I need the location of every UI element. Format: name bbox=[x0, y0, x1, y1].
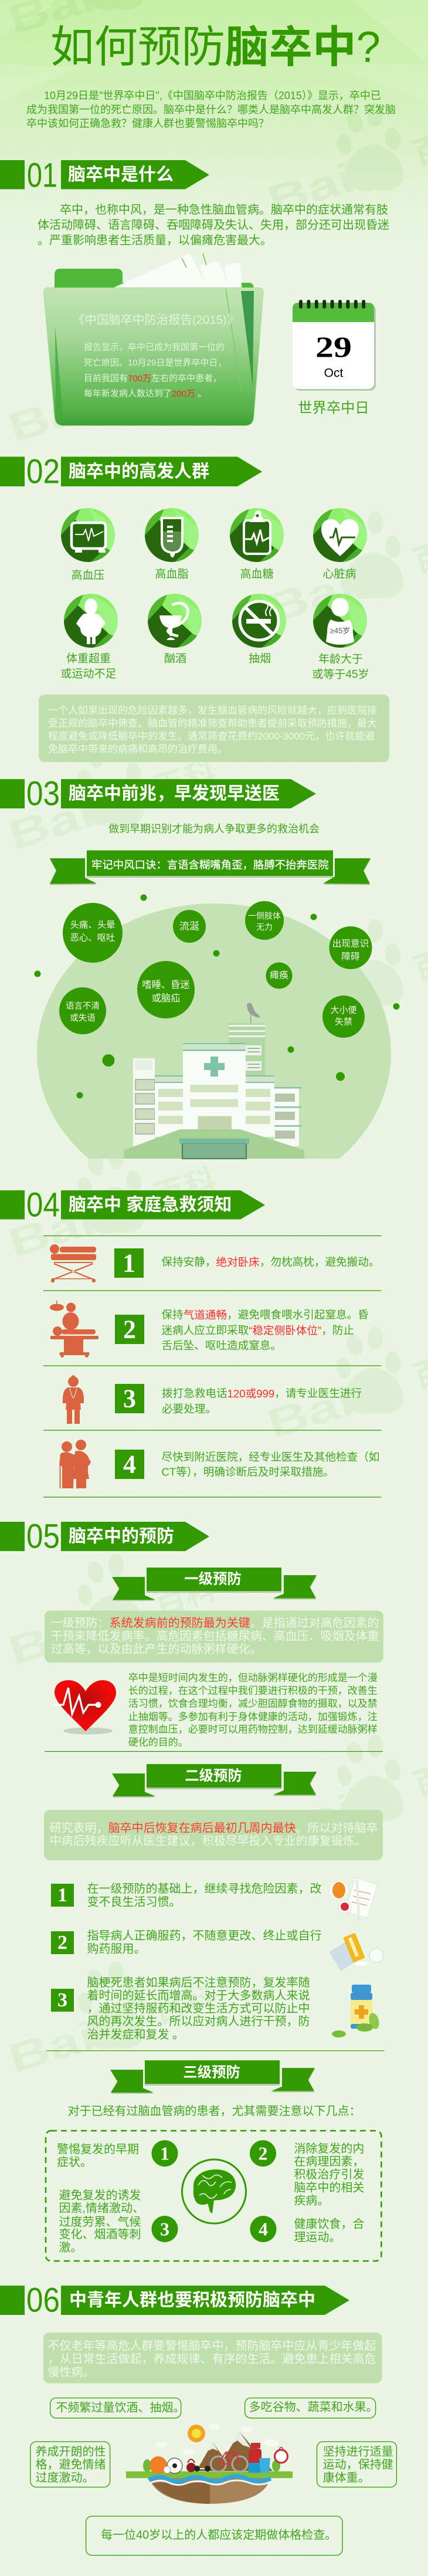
young adults panel: 慢性病。 bbox=[48, 2365, 95, 2379]
basketball bbox=[150, 2456, 167, 2474]
icon: elderly couple bbox=[59, 1440, 91, 1488]
secondary item 1 text: 变不良生活习惯。 bbox=[87, 1895, 181, 1908]
young adults panel bbox=[43, 2333, 382, 2383]
section header 02: 02 bbox=[26, 453, 60, 490]
section header 04: 04 bbox=[26, 1186, 60, 1224]
primary prevention text: 活习惯，饮食合理均衡，减少胆固醇食物的摄取，以及禁 bbox=[128, 1698, 378, 1710]
symptom bubble: speech: 或失语 bbox=[70, 1013, 96, 1023]
step 3 text: 拨打急救电话120或999，请专业医生进行 bbox=[162, 1387, 362, 1400]
secondary item 2 text bbox=[87, 1929, 321, 1955]
section 1 text bbox=[38, 203, 389, 247]
back tower bbox=[229, 1023, 265, 1076]
section header 01: 脑卒中是什么 bbox=[68, 165, 174, 184]
tip: annual checkup bbox=[86, 2516, 342, 2555]
icon: operating table bbox=[50, 1301, 98, 1358]
tip: exercise bbox=[317, 2442, 396, 2487]
screening note panel: 受正规的脑卒中筛查。脑血管的精准筛查帮助患者提前采取预防措施，最大 bbox=[48, 718, 377, 729]
symptom bubble: drowsiness: 嗜睡、昏迷 bbox=[142, 980, 190, 990]
icon: bowl, alcohol bbox=[148, 594, 202, 648]
title: 如何预防脑卒中? bbox=[50, 22, 381, 72]
tertiary point 2 text: 消除复发的内 bbox=[294, 2142, 364, 2155]
tip: alcohol and smoking bbox=[50, 2398, 185, 2418]
clouds bbox=[155, 2424, 278, 2455]
number 1 bbox=[114, 1248, 144, 1278]
step 1 text: 保持安静，绝对卧床，勿枕高枕，避免搬动。 bbox=[162, 1255, 379, 1268]
section header 01 bbox=[0, 156, 209, 195]
bicycle bbox=[211, 2452, 247, 2472]
secondary item 3 text: 脑梗死患者如果病后不注意预防，复发率随 bbox=[87, 1976, 310, 1989]
section header 04 bbox=[0, 1186, 265, 1224]
risk factor labels: 心脏病 bbox=[322, 568, 356, 581]
risk factor labels bbox=[60, 568, 369, 681]
tertiary point 2 text: 疾病。 bbox=[294, 2194, 329, 2208]
symptom bubble: incontinence: 失禁 bbox=[335, 1017, 352, 1027]
hospital backdrop circle bbox=[37, 903, 391, 1159]
young adults panel: 不仅老年等高危人群要警惕脑卒中，预防脑卒中应从青少年做起 bbox=[48, 2339, 376, 2352]
secondary item 2 bbox=[51, 1929, 383, 1971]
symptom bubble: speech: 语言不清 bbox=[66, 1001, 100, 1011]
section header 04: 脑卒中 家庭急救须知 bbox=[69, 1196, 232, 1214]
step 4 text: CT等），明确诊断后及时采取措施。 bbox=[162, 1465, 334, 1478]
tip: personality bbox=[30, 2442, 110, 2487]
icon: pill bottle and blister pack bbox=[329, 1933, 383, 1971]
subtitle: 做到早期识别才能为病人争取更多的救治机会 bbox=[108, 823, 320, 835]
ribbon: tertiary prevention bbox=[110, 2060, 315, 2094]
symptom bubble: incontinence bbox=[322, 996, 365, 1038]
tip: exercise: 坚持进行适量 bbox=[323, 2445, 393, 2458]
secondary item 3 text: 治并发症和复发 。 bbox=[87, 2028, 184, 2042]
divider bbox=[46, 2050, 385, 2052]
symptom bubble: drooling: 流涎 bbox=[179, 921, 199, 932]
number 3: 3 bbox=[123, 1385, 136, 1413]
step 2 text: 舌后坠、呕吐造成窒息。 bbox=[162, 1339, 281, 1352]
step 2 text: 迷病人应立即采取“稳定侧卧体位”，防止 bbox=[162, 1324, 354, 1336]
secondary item 2 text: 指导病人正确服药，不随意更改、终止或自行 bbox=[87, 1929, 321, 1942]
tertiary prevention dashed panel bbox=[46, 2131, 381, 2261]
folder body text: 目前我国有700万左右的卒中患者， bbox=[84, 373, 222, 384]
tertiary point 3 text bbox=[59, 2189, 144, 2254]
secondary prevention panel bbox=[44, 1810, 383, 1860]
tertiary point 2 text bbox=[294, 2142, 364, 2208]
divider bbox=[45, 1751, 383, 1752]
icon: monitor, high blood pressure bbox=[61, 508, 115, 562]
intro text bbox=[26, 90, 396, 129]
step 3 text bbox=[162, 1387, 362, 1415]
tertiary point 4 text bbox=[294, 2218, 364, 2244]
primary prevention panel: 一级预防：系统发病前的预防最为关键。是指通过对高危因素的 bbox=[51, 1616, 379, 1630]
side wings bbox=[155, 1075, 301, 1146]
intro text: 10月29日是"世界卒中日",《中国脑卒中防治报告（2015）》显示，卒中已 bbox=[44, 90, 381, 101]
step 4: hospital check bbox=[59, 1440, 379, 1488]
number 1 bbox=[51, 1884, 74, 1907]
risk factor labels: 或等于45岁 bbox=[312, 668, 369, 681]
ribbon: primary prevention: 一级预防 bbox=[184, 1571, 242, 1587]
section header 02 bbox=[0, 453, 262, 490]
primary prevention text: 卒中是短时间内发生的，但动脉粥样硬化的形成是一个漫 bbox=[128, 1672, 378, 1684]
centre tower bbox=[183, 1043, 246, 1136]
number 3 bbox=[115, 1384, 144, 1413]
symptom bubble: incontinence: 大小便 bbox=[330, 1006, 357, 1015]
secondary item 3 text bbox=[87, 1976, 310, 2042]
ground bbox=[126, 2472, 293, 2478]
mountains bbox=[196, 2432, 273, 2471]
tertiary point 2 text: 积极治疗引发 bbox=[294, 2168, 364, 2181]
primary prevention text: 长的过程，在这个过程中我们要进行积极的干预，改善生 bbox=[128, 1685, 378, 1697]
icon: overweight figure bbox=[64, 594, 118, 648]
water bottle and glass bbox=[249, 2443, 270, 2473]
step 1: lying on a gurney bbox=[50, 1244, 379, 1282]
section header 06: 06 bbox=[26, 2281, 60, 2320]
risk factor labels: 年龄大于 bbox=[318, 652, 363, 665]
step 4 text bbox=[162, 1451, 379, 1478]
young adults panel: ，从日常生活做起，养成规律、有序的生活。避免患上相关高危 bbox=[48, 2352, 376, 2366]
icon: no smoking bbox=[232, 594, 286, 648]
symptom bubble: drowsiness bbox=[137, 961, 195, 1018]
section header 03: 脑卒中前兆，早发现早送医 bbox=[69, 784, 280, 804]
screening note panel bbox=[39, 695, 389, 762]
number 1: 1 bbox=[57, 1884, 67, 1906]
section 1 text: 卒中，也称中风，是一种急性脑血管病。脑卒中的症状通常有肢 bbox=[60, 203, 388, 216]
healthy lifestyle island illustration bbox=[126, 2424, 293, 2504]
section header 06 bbox=[0, 2281, 349, 2320]
icon: gurney bbox=[50, 1244, 96, 1282]
intro text: 卒中该如何正确急救？健康人群也要警惕脑卒中吗？ bbox=[26, 117, 269, 129]
symptom bubble: paralysis: 瘫痪 bbox=[270, 970, 288, 981]
tertiary point 2 text: 脑卒中的相关 bbox=[294, 2181, 364, 2194]
tip: personality: 过度激动。 bbox=[35, 2471, 94, 2484]
icon: person aged 45+ bbox=[313, 594, 367, 648]
folder body text: 每年新发病人数达到了200万 。 bbox=[84, 388, 206, 399]
secondary item 3 text: ，通过坚持服药和改变生活方式可以防止中 bbox=[87, 2002, 310, 2015]
icon: medicine bottle with green pills bbox=[332, 1985, 381, 2037]
symptom bubble: headache bbox=[63, 903, 123, 963]
screening note panel: 程度避免或降低脑卒中的发生。通常筛查花费约2000-3000元，也许就能避 bbox=[48, 731, 375, 742]
tertiary point 3 text: 激。 bbox=[59, 2241, 82, 2254]
hospital illustration bbox=[124, 1003, 304, 1159]
number 2: 2 bbox=[123, 1315, 136, 1343]
dividers bbox=[43, 1235, 381, 1497]
number 3 bbox=[51, 1989, 74, 2012]
primary prevention text bbox=[128, 1672, 378, 1748]
secondary item 3 text: 着时间的延长而增高。对于大多数病人来说 bbox=[87, 1989, 310, 2002]
risk factor labels: 高血脂 bbox=[155, 568, 189, 581]
risk factor labels: 酗酒 bbox=[164, 652, 186, 665]
section header 01: 01 bbox=[27, 156, 57, 195]
primary prevention text: 意控制血压，必要时可以用药物控制，达到延缓动脉粥样 bbox=[128, 1724, 378, 1735]
section 1 text: 体活动障碍、语言障碍、吞咽障碍及失认、失用，部分还可出现昏迷 bbox=[38, 218, 389, 232]
step 2 text: 保持气道通畅，避免喂食喂水引起窒息。昏 bbox=[162, 1308, 369, 1321]
number circles: 2 bbox=[258, 2143, 267, 2164]
left stair block bbox=[133, 1058, 155, 1146]
tertiary intro text: 对于已经有过脑血管病的患者，尤其需要注意以下几点： bbox=[68, 2104, 361, 2118]
intro text: 成为我国第一位的死亡原因。脑卒中是什么？哪类人是脑卒中高发人群？突发脑 bbox=[26, 104, 396, 116]
tip: personality: 养成开朗的性 bbox=[35, 2445, 106, 2458]
symptom bubble: paralysis bbox=[266, 962, 292, 989]
risk factor labels: 体重超重 bbox=[66, 652, 111, 665]
kettlebell and dumbbell bbox=[186, 2459, 210, 2472]
symptom bubble: drooling bbox=[173, 910, 206, 943]
number 2 bbox=[115, 1315, 144, 1344]
number 2 bbox=[51, 1931, 74, 1954]
secondary prevention panel: 研究表明，脑卒中后恢复在病后最初几周内最快。所以对待脑卒 bbox=[50, 1822, 378, 1835]
section header 02: 脑卒中的高发人群 bbox=[69, 462, 209, 481]
river bbox=[149, 2476, 271, 2482]
ribbon: tertiary prevention: 三级预防 bbox=[183, 2065, 240, 2080]
folder illustration bbox=[43, 253, 263, 426]
soil bbox=[149, 2478, 270, 2504]
tip: personality: 格，避免情绪 bbox=[35, 2458, 106, 2472]
symptom bubble: limb weakness bbox=[245, 901, 284, 940]
risk factor labels: 抽烟 bbox=[249, 652, 271, 665]
ribbon: secondary prevention bbox=[112, 1764, 317, 1798]
ribbon: secondary prevention: 二级预防 bbox=[185, 1768, 242, 1784]
icon: person aged 45+: ≥45岁 bbox=[330, 627, 350, 635]
ribbon: primary prevention bbox=[112, 1568, 317, 1601]
folder heading: 《中国脑卒中防治报告(2015)》 bbox=[73, 313, 239, 327]
calendar: 29 Oct bbox=[293, 300, 376, 391]
number 4: 4 bbox=[123, 1450, 136, 1478]
tertiary point 4 text: 理运动。 bbox=[294, 2230, 341, 2244]
green mound and entrance bbox=[124, 1129, 304, 1159]
symptom bubble: consciousness bbox=[330, 926, 372, 969]
symptom bubble: speech bbox=[59, 987, 106, 1034]
section header 05: 脑卒中的预防 bbox=[69, 1526, 174, 1546]
tertiary point 1 text: 症状。 bbox=[57, 2155, 92, 2169]
trees bbox=[143, 2459, 280, 2472]
folder back bbox=[55, 269, 254, 329]
number circles bbox=[151, 2140, 277, 2242]
tertiary point 2 text: 在病理因素， bbox=[294, 2155, 364, 2168]
number circles: 1 bbox=[160, 2143, 169, 2164]
icon: brain in circle bbox=[182, 2159, 246, 2223]
stopwatch bbox=[274, 2448, 287, 2463]
section header 05: 05 bbox=[26, 1517, 60, 1556]
primary prevention text: 止抽烟等。多参加有利于身体健康的活动，加强锻炼，注 bbox=[128, 1711, 378, 1722]
folder body text bbox=[84, 341, 226, 399]
calendar: 29 Oct: Oct bbox=[324, 366, 343, 380]
primary prevention text: 硬化的目的。 bbox=[128, 1736, 188, 1748]
symptom bubble: consciousness: 出现意识 bbox=[332, 937, 369, 949]
tertiary point 1 text bbox=[57, 2142, 139, 2169]
risk factor labels: 高血压 bbox=[71, 569, 105, 582]
secondary item 3 text: 风的再次发生。所以应对病人进行干预，防 bbox=[87, 2015, 310, 2028]
step 2 text bbox=[162, 1308, 369, 1352]
tip: diet bbox=[245, 2398, 378, 2418]
screening note panel: 免脑卒中带来的病痛和高昂的治疗费用。 bbox=[48, 744, 227, 754]
calendar caption: 世界卒中日 bbox=[298, 400, 369, 417]
tertiary point 3 text: 变化、烟酒等刺 bbox=[59, 2228, 141, 2241]
step 2: airway bbox=[50, 1301, 369, 1358]
icon: heart, heart disease bbox=[313, 508, 367, 562]
symptom bubble: headache: 头痛、头晕 bbox=[70, 920, 115, 930]
secondary item 3 bbox=[51, 1976, 381, 2042]
number 3: 3 bbox=[57, 1989, 67, 2011]
primary prevention panel: 过高等，以及由此产生的动脉粥样硬化。 bbox=[51, 1643, 262, 1656]
step 3 text: 必要处理。 bbox=[162, 1403, 216, 1415]
calendar: 29 Oct: 29 bbox=[315, 330, 352, 363]
decorative dots bbox=[34, 894, 400, 1098]
ribbon: mnemonic bbox=[50, 851, 371, 885]
folder body text: 报告显示，卒中已成为我国第一位的 bbox=[84, 341, 225, 352]
icon: red heart with ECG bbox=[53, 1680, 116, 1734]
section header 06: 中青年人群也要积极预防脑卒中 bbox=[69, 2290, 315, 2310]
secondary prevention panel: 中病后残疾应听从医生建议，积极尽早投入专业的康复锻炼。 bbox=[50, 1834, 366, 1848]
icon: IV bag, high blood lipids bbox=[145, 508, 199, 562]
tertiary point 3 text: 因素,情绪激动、 bbox=[59, 2201, 144, 2215]
tip: exercise: 运动，保持健 bbox=[323, 2458, 393, 2472]
secondary item 1 text bbox=[87, 1882, 321, 1908]
baseball bbox=[164, 2466, 171, 2473]
symptom bubble: consciousness: 障碍 bbox=[341, 952, 360, 962]
section header 05 bbox=[0, 1517, 209, 1556]
tertiary point 4 text: 健康饮食，合 bbox=[294, 2218, 364, 2231]
tertiary point 3 text: 过度劳累、气候 bbox=[59, 2215, 141, 2229]
folder front bbox=[43, 287, 263, 426]
primary prevention panel: 干预来降低发病率。高危因素包括糖尿病、高血压、吸烟及体重 bbox=[51, 1630, 379, 1643]
tip: alcohol and smoking: 不频繁过量饮酒、抽烟。 bbox=[56, 2401, 185, 2415]
tip: annual checkup: 每一位40岁以上的人都应该定期做体格检查。 bbox=[101, 2528, 337, 2542]
number 1: 1 bbox=[123, 1248, 135, 1278]
secondary item 1 text: 在一级预防的基础上，继续寻找危险因素，改 bbox=[87, 1882, 321, 1895]
secondary item 1 bbox=[51, 1877, 378, 1921]
tip: exercise: 康体重。 bbox=[323, 2471, 370, 2484]
ribbon: mnemonic: 牢记中风口诀：言语含糊嘴角歪，胳膊不抬奔医院 bbox=[91, 859, 329, 871]
symptom bubble: limb weakness: 一侧肢体 bbox=[248, 911, 281, 920]
tertiary point 3 text: 避免复发的诱发 bbox=[59, 2189, 141, 2202]
section header 03 bbox=[0, 774, 316, 813]
hospital cross bbox=[204, 1057, 225, 1077]
section 1 text: 。严重影响患者生活质量，以偏瘫危害最大。 bbox=[38, 233, 272, 247]
risk factor icons bbox=[61, 508, 367, 648]
satellite dish bbox=[247, 1003, 260, 1024]
primary prevention panel bbox=[45, 1610, 383, 1663]
icon: clipboard, high blood sugar bbox=[230, 508, 284, 562]
section header 03: 03 bbox=[26, 774, 60, 813]
tip: diet: 多吃谷物、蔬菜和水果。 bbox=[249, 2401, 378, 2413]
soccer ball bbox=[167, 2458, 182, 2473]
risk factor labels: 或运动不足 bbox=[60, 668, 117, 681]
step 3: call ambulance bbox=[63, 1375, 362, 1424]
secondary item 2 text: 购药服用。 bbox=[87, 1942, 145, 1955]
risk factor labels: 高血糖 bbox=[240, 568, 274, 581]
number 2: 2 bbox=[57, 1932, 67, 1954]
icon: nurse bbox=[63, 1375, 84, 1424]
screening note panel: 一个人如果出现的危险因素越多，发生脑血管病的风险就越大，应到医院接 bbox=[48, 705, 377, 716]
symptom bubble: limb weakness: 无力 bbox=[256, 922, 273, 932]
symptom bubble: drowsiness: 或脑疝 bbox=[152, 993, 180, 1004]
symptom bubble: headache: 恶心、呕吐 bbox=[70, 933, 115, 943]
number circles: 4 bbox=[259, 2219, 268, 2240]
icon: thermometer and pills bbox=[330, 1877, 378, 1921]
folder papers bbox=[111, 253, 242, 291]
sun bbox=[188, 2425, 205, 2442]
folder body text: 死亡原因。10月29日是世界卒中日， bbox=[84, 358, 226, 368]
tertiary point 1 text: 警惕复发的早期 bbox=[57, 2142, 139, 2156]
step 4 text: 尽快到附近医院，经专业医生及其他检查（如 bbox=[162, 1451, 379, 1463]
number circles: 3 bbox=[160, 2219, 169, 2240]
number 4 bbox=[115, 1450, 144, 1479]
